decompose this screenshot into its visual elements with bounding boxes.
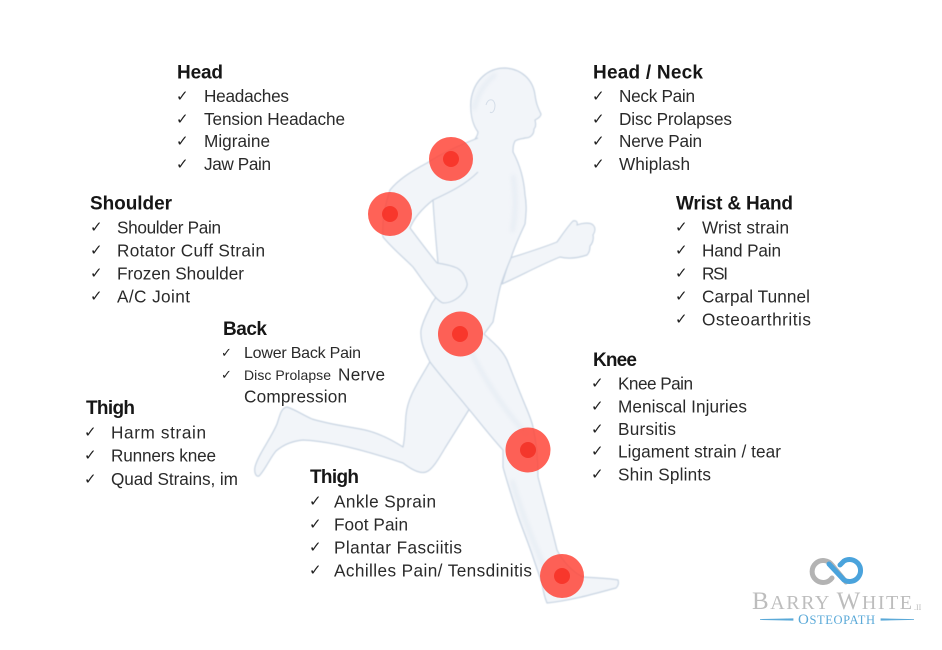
logo: Barry White Osteopath [752,560,922,628]
torso, head and front leg [421,68,618,603]
text block: Back: Nerve [338,364,385,384]
text block: Thigh left: Runners knee [111,446,216,466]
text block: Head: ✓ [176,110,189,128]
text block: Knee: Shin Splints [618,464,711,484]
text block: Knee [591,350,781,484]
rear leg and foot [255,358,470,476]
text block: Shoulder: ✓ [90,287,103,305]
text block: Knee: ✓ [591,420,604,438]
text block: Back [221,319,385,406]
text block: Head [176,62,345,174]
text block: Wrist and Hand: RSI [702,264,728,284]
far arm and hand [502,221,595,284]
logo subtitle: OSTEOPATH [798,612,875,628]
text block: Shoulder: Shoulder [90,194,173,214]
pain marker: knee [506,428,550,472]
text block: Wrist and Hand: ✓ [675,218,688,236]
near arm and fist [383,138,478,303]
text block: Wrist and Hand: Osteoarthritis [702,310,811,330]
text block: Thigh lower: ✓ [309,492,322,510]
text block: Head / Neck: Neck Pain [619,86,695,106]
text block: Shoulder: ✓ [90,241,103,259]
text block: Thigh lower: ✓ [309,515,322,533]
text block: Head / Neck [592,62,732,174]
text block: Shoulder: Rotator Cuff Strain [117,240,265,260]
text block: Head / Neck: ✓ [592,87,605,105]
logo: Barry White Osteopath: .II [914,603,922,612]
pain marker: hip [438,312,483,356]
text block: Knee: ✓ [591,397,604,415]
text block: Back: ✓ [221,368,232,383]
text block: Thigh lower: Achilles Pain/ Tensdinitis [334,560,532,580]
text block: Head: Tension Headache [204,109,345,129]
text block: Wrist and Hand: Wrist & Hand [676,194,793,214]
body shading [470,74,548,575]
text block: Thigh left: ✓ [84,446,97,464]
text block: Head / Neck: ✓ [592,155,605,173]
text block: Thigh lower [309,467,532,580]
icon: infinity loops [812,560,861,582]
pain marker: elbow [368,192,412,236]
text block: Knee: ✓ [591,442,604,460]
text block: Knee: Meniscal Injuries [618,396,747,416]
text block: Wrist and Hand: ✓ [675,287,688,305]
text block: Shoulder: Frozen Shoulder [117,264,244,284]
text block: Knee: Ligament strain / tear [618,442,781,462]
text block: Head / Neck: Nerve Pain [619,131,702,151]
text block: Back: Compression [244,386,347,406]
text block: Head: ✓ [176,155,189,173]
text block: Wrist and Hand: Carpal Tunnel [702,286,810,306]
text block: Back: Lower Back Pain [244,345,361,362]
text block: Head: Head [177,62,223,84]
text block: Head: Headaches [204,86,289,106]
text block: Head / Neck: ✓ [592,110,605,128]
text block: Thigh lower: Foot Pain [334,514,408,534]
text block: Thigh lower: Ankle Sprain [334,492,436,512]
text block: Thigh lower: ✓ [309,538,322,556]
text block: Wrist and Hand: Hand Pain [702,240,781,260]
text block: Thigh left: Harm strain [111,422,206,442]
text block: Wrist and Hand: Wrist strain [702,218,789,238]
text block: Head: Migraine [204,131,270,151]
text block: Head / Neck: Whiplash [619,154,690,174]
text block: Back: Disc Prolapse [244,367,331,383]
pain marker: shoulder [429,137,473,181]
text block: Thigh left: Thigh [86,398,135,419]
text block: Shoulder [90,194,265,306]
text block: Thigh left: ✓ [84,423,97,441]
text block: Head: Jaw Pain [204,154,271,174]
text block: Head / Neck: Disc Prolapses [619,109,732,129]
text block: Back: Back [223,319,267,340]
text block: Head: ✓ [176,132,189,150]
text block: Head / Neck: ✓ [592,132,605,150]
running human body figure [255,68,618,603]
text block: Thigh lower: Thigh [310,467,359,488]
text block: Wrist and Hand: ✓ [675,264,688,282]
pain marker: ankle [540,554,584,598]
text block: Wrist and Hand [675,194,811,330]
text block: Thigh lower: Plantar Fasciitis [334,538,462,558]
face and ear detail [486,100,495,113]
logo name: BARRY WHITE [752,588,912,615]
text block: Knee: ✓ [591,465,604,483]
text block: Knee: Knee [593,350,637,371]
text block: Knee: Knee Pain [618,374,693,394]
text block: Knee: ✓ [591,374,604,392]
text block: Shoulder: ✓ [90,264,103,282]
text block: Thigh left: Quad Strains, im [111,469,238,489]
text block: Thigh left: ✓ [84,470,97,488]
text block: Shoulder: A/C Joint [117,286,190,306]
text block: Wrist and Hand: ✓ [675,241,688,259]
text block: Back: ✓ [221,346,232,361]
text block: Head: ✓ [176,87,189,105]
text block: Shoulder: Shoulder Pain [117,218,221,238]
text block: Thigh left [84,398,238,489]
text block: Shoulder: ✓ [90,218,103,236]
text block: Head / Neck: Head / Neck [593,62,703,84]
text block: Thigh lower: ✓ [309,561,322,579]
text block: Knee: Bursitis [618,419,676,439]
text block: Wrist and Hand: ✓ [675,310,688,328]
